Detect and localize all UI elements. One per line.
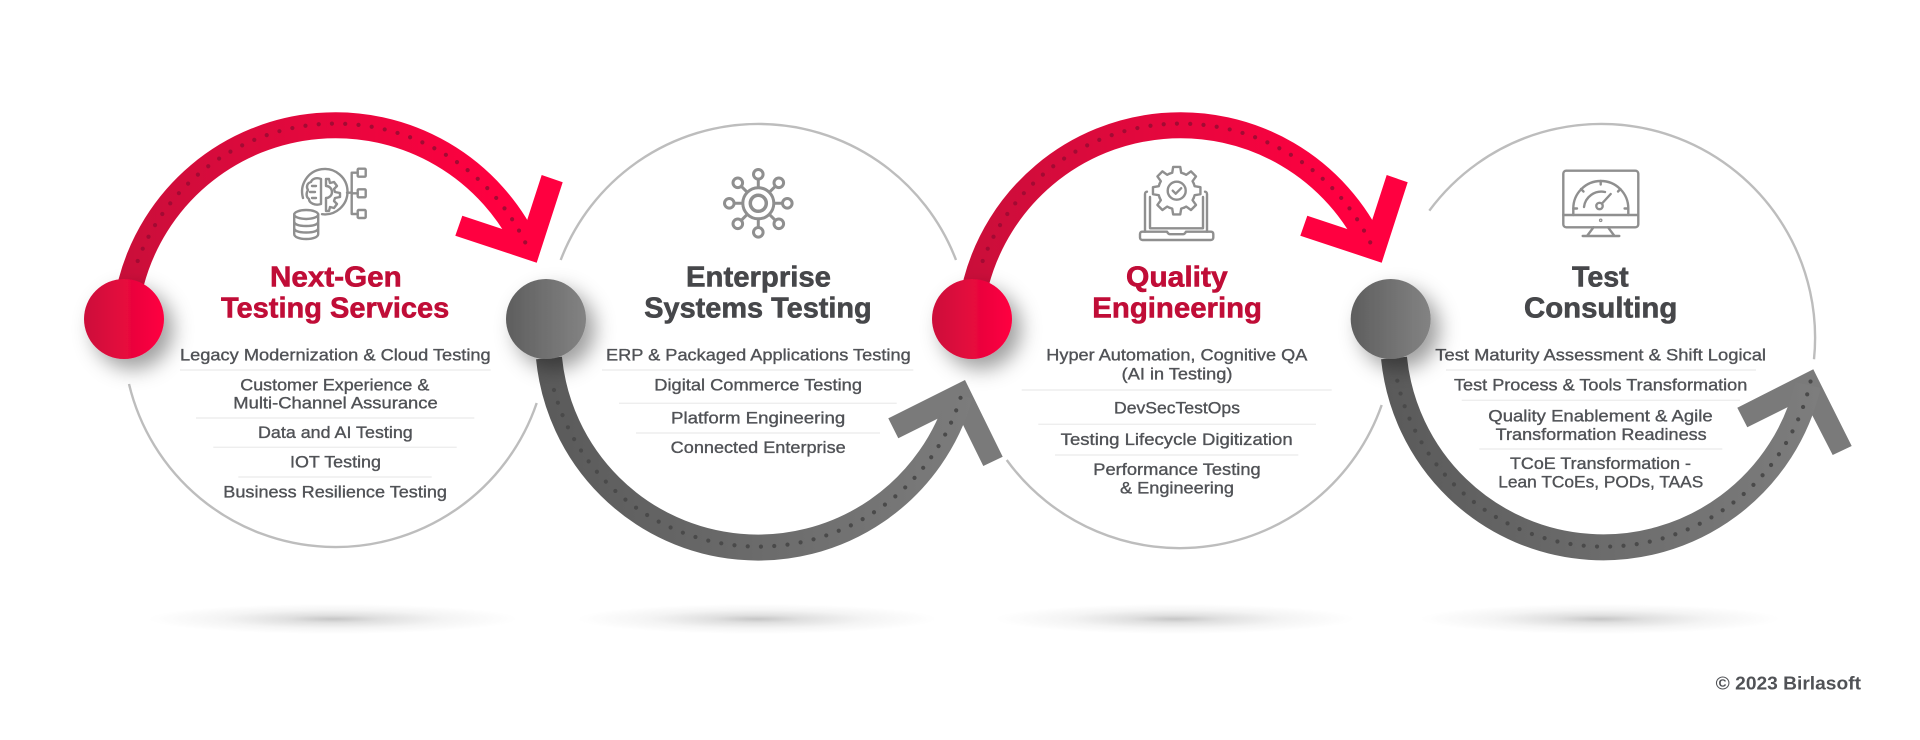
list of services: DevSecTestOps: [1114, 398, 1240, 417]
list of services: ERP & Packaged Applications Testing: [606, 346, 911, 365]
list of services: Data and AI Testing: [258, 423, 413, 442]
heading: [644, 262, 872, 325]
heading: Systems Testing: [644, 293, 872, 325]
heading: [1092, 262, 1262, 325]
list of services: Performance Testing: [1093, 460, 1261, 479]
heading: Engineering: [1092, 293, 1262, 325]
list of services: (AI in Testing): [1122, 364, 1232, 383]
heading: Quality: [1126, 262, 1228, 294]
arrow: grey arc 1: [549, 358, 1003, 548]
node: red 2: [932, 279, 1012, 359]
heading: Consulting: [1524, 293, 1677, 325]
node: grey 1: [506, 279, 586, 359]
list of services: TCoE Transformation -: [1510, 454, 1691, 473]
heading: Testing Services: [221, 293, 449, 325]
icon: brain gear database: [294, 169, 366, 239]
panel: Test Consulting: [1429, 124, 1815, 491]
arrow: red arc 2: [976, 124, 1408, 283]
panel: Quality Engineering: [1007, 167, 1382, 548]
panel: Enterprise Systems Testing: [561, 124, 956, 457]
list of services: Connected Enterprise: [671, 438, 846, 457]
node: grey 2: [1351, 279, 1431, 359]
list of services: [180, 346, 491, 501]
arrow: red arc 1: [131, 124, 563, 283]
heading: Next-Gen: [270, 262, 402, 294]
icon: monitor with gauge: [1563, 171, 1638, 236]
icon: gear on laptop: [1140, 167, 1213, 240]
heading: [1524, 262, 1677, 325]
list of services: Test Maturity Assessment & Shift Logical: [1435, 346, 1766, 365]
list of services: Transformation Readiness: [1496, 425, 1707, 444]
icon: network hub: [724, 170, 792, 237]
copyright: © 2023 Birlasoft: [1716, 673, 1861, 693]
list of services: Test Process & Tools Transformation: [1454, 376, 1747, 395]
list of services: [1435, 346, 1766, 491]
list of services: Testing Lifecycle Digitization: [1061, 430, 1293, 449]
panel: Next-Gen Testing Services: [129, 169, 537, 547]
list of services: Business Resilience Testing: [223, 482, 447, 501]
list of services: & Engineering: [1120, 478, 1234, 497]
heading: Enterprise: [686, 262, 831, 294]
list of services: Platform Engineering: [671, 409, 845, 428]
arrow: grey arc 2: [1394, 358, 1852, 547]
heading: [221, 262, 449, 325]
list of services: Lean TCoEs, PODs, TAAS: [1498, 472, 1703, 491]
heading: Test: [1572, 262, 1629, 294]
list of services: Customer Experience &: [240, 376, 430, 395]
list of services: Legacy Modernization & Cloud Testing: [180, 346, 491, 365]
list of services: Hyper Automation, Cognitive QA: [1046, 346, 1308, 365]
ground shadows: [148, 604, 1780, 634]
list of services: [602, 346, 913, 457]
list of services: Digital Commerce Testing: [654, 376, 862, 395]
list of services: [1022, 346, 1332, 497]
list of services: Quality Enablement & Agile: [1488, 407, 1713, 426]
list of services: Multi-Channel Assurance: [233, 393, 438, 412]
node: red 1: [84, 279, 164, 359]
list of services: IOT Testing: [290, 453, 381, 472]
